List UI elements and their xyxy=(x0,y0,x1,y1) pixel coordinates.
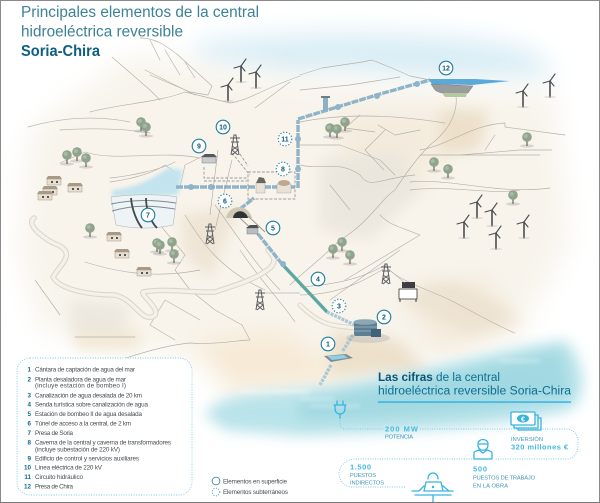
figure: power xyxy=(385,424,419,440)
legend list: 11 xyxy=(24,474,31,481)
buildings of the power station xyxy=(201,154,291,234)
legend panel xyxy=(17,358,192,495)
legend list: 3 xyxy=(27,392,31,400)
electric station xyxy=(399,282,417,302)
seawater intake xyxy=(324,354,353,362)
legend list: 6 xyxy=(27,420,31,428)
marker 6 xyxy=(218,194,232,208)
legend list: Circuito hidráulico xyxy=(35,474,83,481)
legend list: (incluye subestación de 220 kV) xyxy=(35,446,120,454)
icon: worker xyxy=(474,440,492,459)
figure: investment xyxy=(511,436,569,452)
marker 2: 2 xyxy=(382,314,386,322)
pump station 5 xyxy=(246,225,259,234)
tunnel entrance xyxy=(226,207,265,235)
marker 7: 7 xyxy=(146,212,150,220)
control building xyxy=(201,154,217,163)
figure: indirect jobs: PUESTOS xyxy=(350,473,376,479)
legend list: (incluye estación de bombeo I) xyxy=(35,382,126,390)
marker 1: 1 xyxy=(326,342,330,348)
legend list: Presa de Soria xyxy=(35,430,73,437)
legend list: Senda turística sobre canalización de agua xyxy=(35,402,148,408)
icon: money: € xyxy=(521,416,525,423)
marker 3: 3 xyxy=(337,304,341,310)
marker 12 xyxy=(439,61,453,75)
underground links dashed xyxy=(204,153,295,199)
marker 5: 5 xyxy=(271,226,275,232)
marker 11 xyxy=(278,132,292,146)
road xyxy=(32,218,353,328)
figure: indirect jobs xyxy=(350,462,384,486)
dotted connector xyxy=(339,418,578,487)
transformer building xyxy=(277,180,291,193)
marker 1 xyxy=(321,337,335,351)
legend list: 8 xyxy=(27,440,31,446)
marker 9: 9 xyxy=(197,144,201,150)
desalination plant xyxy=(346,319,390,343)
figure: power: 200 MW xyxy=(385,424,419,434)
Chira reservoir and dam xyxy=(428,79,510,97)
legend list: Caverna de la central y caverna de transformadores xyxy=(35,440,171,446)
legend list: Presa de Chira xyxy=(35,484,73,490)
title: Principales elementos de la central xyxy=(21,4,259,21)
terrain shading patches xyxy=(70,110,520,375)
legend list: 5 xyxy=(27,411,31,418)
legend list: 2 xyxy=(27,376,31,384)
marker 2 xyxy=(377,310,391,324)
legend list: 7 xyxy=(27,430,31,437)
trees xyxy=(60,117,534,266)
icon: plug xyxy=(334,401,346,418)
figure: jobs: 500 xyxy=(473,464,487,474)
marker 8 xyxy=(276,162,290,176)
symbol key: Elementos en superficie xyxy=(223,478,287,486)
figures heading: Las cifras de la central xyxy=(378,372,500,384)
figure: jobs: PUESTOS DE TRABAJO xyxy=(473,476,536,482)
figures heading xyxy=(378,372,572,403)
legend list: 9 xyxy=(27,456,31,462)
sky wash xyxy=(190,34,560,80)
icon: laptop user xyxy=(412,473,453,502)
terrain wash xyxy=(18,55,570,395)
legend list: Planta desaladora de agua de mar xyxy=(35,376,126,384)
legend list xyxy=(24,366,171,490)
figure: jobs: EN LA OBRA xyxy=(473,484,508,490)
sea xyxy=(205,340,583,436)
village houses xyxy=(37,176,152,276)
wind turbines xyxy=(221,59,556,250)
marker 12: 12 xyxy=(442,66,450,72)
marker 4: 4 xyxy=(316,276,320,284)
legend list: 12 xyxy=(24,484,31,490)
legend list: 1 xyxy=(27,366,31,374)
figure: investment: INVERSIÓN xyxy=(511,436,543,443)
markers xyxy=(141,61,453,351)
figure: investment: 320 millones € xyxy=(511,442,569,452)
icon: money xyxy=(511,412,541,430)
legend list: Canalización de agua desalada de 20 km xyxy=(35,392,142,400)
marker 4 xyxy=(311,272,325,286)
legend list: Túnel de acceso a la central, de 2 km xyxy=(35,420,131,428)
title: Soria-Chira xyxy=(21,43,100,60)
hydraulic circuit pipeline xyxy=(176,80,430,385)
dam: Presa de Soria xyxy=(111,198,176,228)
figure: indirect jobs: INDIRECTOS xyxy=(350,480,384,486)
symbol key xyxy=(212,477,288,496)
mountain and contour lines xyxy=(28,38,565,360)
marker 11: 11 xyxy=(281,136,289,144)
marker 10 xyxy=(216,120,230,134)
pylons xyxy=(205,135,391,310)
marker 10: 10 xyxy=(219,124,227,132)
marker 8: 8 xyxy=(281,166,285,174)
legend list: 4 xyxy=(27,402,31,408)
surge tower xyxy=(321,96,330,111)
marker 7 xyxy=(141,208,155,222)
cavern building xyxy=(256,177,266,193)
title xyxy=(21,4,259,60)
legend list: Cántara de captación de agua del mar xyxy=(35,366,135,374)
marker 6: 6 xyxy=(223,198,227,206)
legend list: Edificio de control y servicios auxiliares xyxy=(35,456,139,462)
legend list: Línea eléctrica de 220 kV xyxy=(35,464,103,472)
figure: jobs xyxy=(473,464,536,490)
marker 3 xyxy=(332,299,346,313)
legend list: Estación de bombeo II de agua desalada xyxy=(35,411,142,418)
symbol key: Elementos subterráneos xyxy=(223,489,288,496)
Soria reservoir xyxy=(111,168,183,228)
marker 5 xyxy=(266,221,280,235)
figure: indirect jobs: 1.500 xyxy=(350,462,371,472)
power lines xyxy=(210,150,405,295)
legend list: 10 xyxy=(24,464,31,472)
marker 9 xyxy=(192,139,206,153)
figures heading: hidroeléctrica reversible Soria-Chira xyxy=(378,386,572,398)
figure: power: POTENCIA xyxy=(385,434,413,440)
title: hidroeléctrica reversible xyxy=(21,24,183,40)
